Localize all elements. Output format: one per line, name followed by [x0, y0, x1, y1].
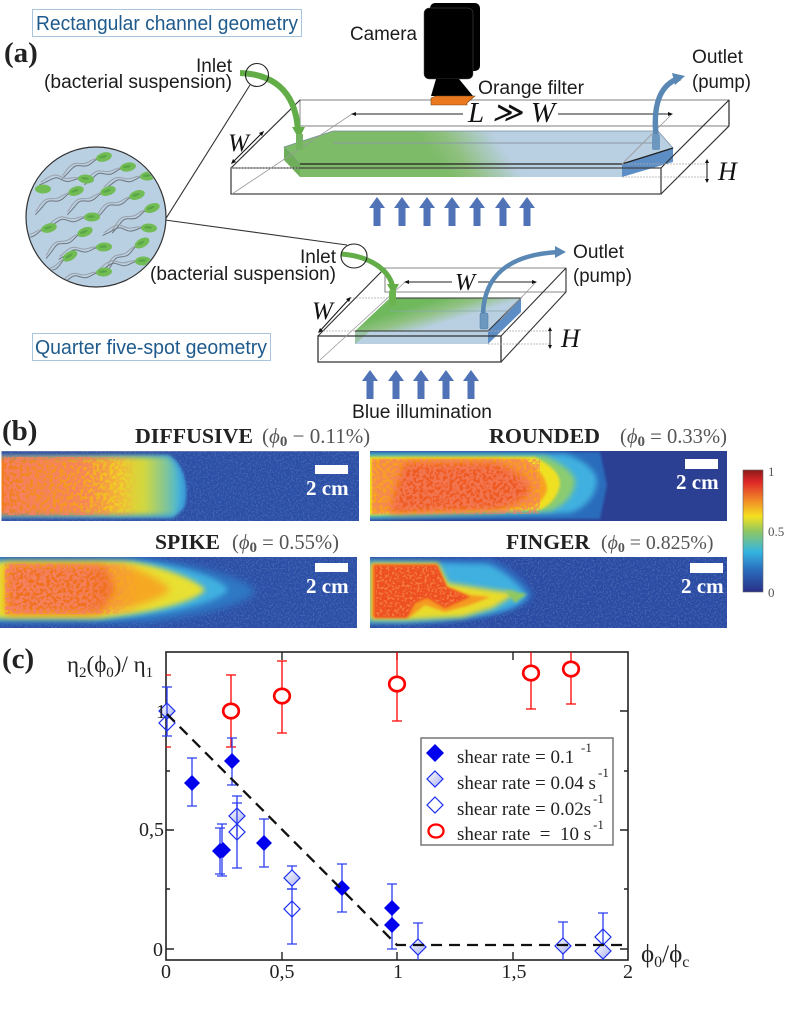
- heading rounded: ROUNDED: [489, 424, 600, 448]
- colour bar: [743, 464, 784, 600]
- axis tick labels: 2: [623, 961, 633, 983]
- outlet tube top: [652, 73, 685, 150]
- orange filter label: Orange filter: [478, 78, 585, 99]
- quarter five-spot cell: [318, 268, 566, 362]
- heading diffusive: DIFFUSIVE: [135, 424, 253, 448]
- rectangular channel cell: [231, 100, 729, 194]
- inlet tube lower: [341, 244, 399, 306]
- axis tick labels: [139, 701, 633, 983]
- heading finger: 0: [618, 541, 625, 556]
- inlet label lower: (bacterial suspension): [150, 264, 336, 285]
- axes frame and ticks: [166, 652, 628, 960]
- H dimension lower: H: [560, 324, 581, 353]
- panel b: concentration maps: [0, 415, 784, 628]
- label: rectangular channel geometry: Rectangular channel geometry: [36, 13, 298, 35]
- heatmap finger: [365, 557, 727, 628]
- magnifier connector lines: [165, 85, 347, 245]
- camera label: Camera: [350, 24, 417, 45]
- legend: -1: [593, 817, 604, 832]
- outlet label lower: Outlet: [573, 242, 625, 263]
- legend: shear rate = 0.02s: [457, 799, 591, 820]
- x axis title: c: [682, 954, 689, 971]
- outlet label top: [692, 47, 751, 93]
- heading rounded: [489, 424, 727, 450]
- scale bar finger: [681, 563, 724, 598]
- label: quarter five-spot geometry: Quarter five-spot geometry: [35, 337, 267, 359]
- x axis title: /ϕ: [662, 941, 682, 968]
- blue arrows top: [369, 197, 535, 226]
- legend: shear rate = 0.04 s: [457, 773, 596, 794]
- legend: -1: [598, 765, 609, 780]
- y axis title: 0: [106, 665, 114, 681]
- inlet label lower: [150, 247, 337, 285]
- W dimension lower: [312, 270, 537, 333]
- heading spike: (ϕ: [232, 532, 250, 554]
- magnified view of bacteria: [25, 146, 167, 288]
- y axis title: 1: [146, 665, 153, 681]
- heading diffusive: − 0.11%): [287, 424, 370, 448]
- colour bar: 1: [768, 464, 774, 479]
- legend: shear rate = 0.1: [457, 747, 574, 768]
- W dimension top: W: [228, 130, 251, 157]
- panel label a: (a): [4, 37, 38, 69]
- colour bar: 0.5: [768, 524, 784, 539]
- heading diffusive: (ϕ: [262, 424, 280, 448]
- x axis title: ϕ: [641, 941, 654, 968]
- y axis title: )/ η: [114, 652, 146, 677]
- scale bar finger: 2 cm: [681, 574, 724, 598]
- legend: [421, 738, 613, 845]
- series: shear rate 0.1 per second: [184, 738, 400, 949]
- heading rounded: 0: [638, 434, 645, 450]
- heading spike: [155, 530, 339, 556]
- inlet label top: [44, 56, 233, 93]
- colour bar: 0: [768, 585, 774, 600]
- blue illumination label: Blue illumination: [352, 402, 492, 423]
- outlet label lower: [573, 242, 632, 287]
- axis tick labels: 1,5: [502, 961, 526, 983]
- panel label c: (c): [2, 643, 34, 675]
- inlet label top: (bacterial suspension): [44, 72, 232, 93]
- heading rounded: (ϕ: [620, 426, 638, 448]
- dashed trend line: [167, 714, 622, 945]
- H dimension top: [705, 157, 738, 186]
- panel label b: (b): [2, 415, 37, 447]
- scale bar rounded: [676, 459, 719, 494]
- heading finger: (ϕ: [601, 532, 618, 554]
- scale bar spike: 2 cm: [306, 574, 349, 598]
- heading rounded: = 0.33%): [645, 426, 727, 448]
- legend: -1: [581, 740, 592, 755]
- heading spike: = 0.55%): [257, 532, 339, 554]
- heading finger: = 0.825%): [625, 532, 713, 554]
- H dimension lower: [548, 324, 581, 353]
- series: shear rate 0.02 per second: [159, 687, 611, 945]
- scale bar rounded: 2 cm: [676, 470, 719, 494]
- heading finger: FINGER: [506, 530, 591, 554]
- outlet label top: Outlet: [692, 47, 744, 68]
- scale bar diffusive: [306, 465, 349, 500]
- L much greater than W dimension: [351, 97, 673, 129]
- outlet label top: (pump): [692, 72, 751, 93]
- panel a: channel geometries: [3, 3, 751, 423]
- legend: -1: [593, 791, 604, 806]
- heading diffusive: [135, 424, 370, 450]
- series: shear rate 0.04 per second: [159, 703, 611, 960]
- H dimension top: H: [717, 157, 738, 186]
- heading diffusive: 0: [280, 434, 287, 450]
- axis tick labels: 0,5: [139, 819, 164, 841]
- heading spike: 0: [250, 540, 257, 556]
- L much greater than W dimension: L ≫ W: [467, 97, 558, 129]
- panel c: viscosity ratio chart: [2, 643, 689, 983]
- inlet label top: Inlet: [196, 56, 233, 77]
- y axis title: 2: [79, 665, 87, 681]
- heading spike: SPIKE: [155, 530, 220, 554]
- axis tick labels: 0: [153, 939, 163, 961]
- heatmap diffusive: [0, 451, 360, 521]
- axis tick labels: 0,5: [270, 961, 294, 983]
- scale bar diffusive: 2 cm: [306, 476, 349, 500]
- legend: shear rate = 10 s: [457, 824, 591, 845]
- y axis title: η: [67, 652, 79, 677]
- outlet label lower: (pump): [573, 266, 632, 287]
- blue arrows lower: [362, 370, 479, 399]
- axis tick labels: 0: [161, 961, 171, 983]
- y axis title: (ϕ: [87, 652, 106, 677]
- W dimension lower: W: [312, 298, 335, 325]
- x axis title: 0: [654, 954, 662, 971]
- series: shear rate 10 per second: [166, 652, 579, 747]
- inlet tube top: [240, 64, 305, 150]
- axis tick labels: 1: [393, 961, 403, 983]
- icon: camera with orange filter: [424, 3, 480, 105]
- heading finger: [506, 530, 713, 556]
- W dimension top: [228, 130, 264, 164]
- heatmap spike: [0, 557, 357, 628]
- W dimension lower: W: [455, 270, 477, 296]
- outlet tube lower: [480, 246, 566, 329]
- inlet label lower: Inlet: [300, 247, 337, 268]
- axis tick labels: 1: [156, 701, 166, 723]
- scale bar spike: [306, 563, 349, 598]
- heatmap rounded: [365, 451, 727, 521]
